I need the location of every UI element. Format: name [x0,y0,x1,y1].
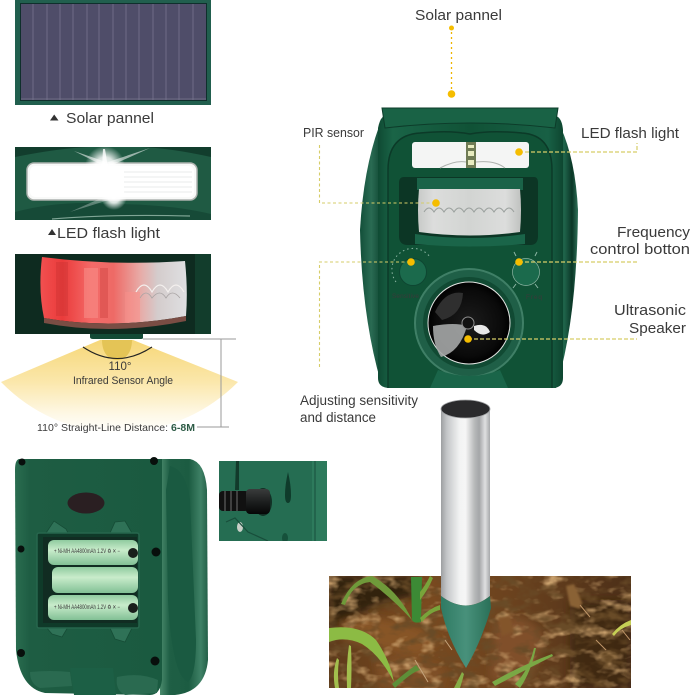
callout: LED flash light: LED flash light [581,126,679,142]
mount neck [30,671,158,695]
panel: power jack inset photo [219,461,327,543]
right side wing [548,114,578,388]
sensor mount [90,334,143,339]
solar lid [382,108,558,128]
bottom stand [430,370,508,388]
callout: PIR sensor: PIR sensor [303,125,365,140]
diagram: infrared sensor angle [1,334,238,434]
sensitivity knob [392,248,430,300]
caption: solar panel: Solar pannel [66,110,154,127]
photo: soil with seedlings [329,576,631,688]
steel tube [441,409,490,606]
angle label: Infrared Sensor Angle [73,375,173,387]
PIR sensor housing [399,177,538,246]
callout: solar pannel [415,7,502,98]
soil stones and straw [415,584,630,682]
device: front view [360,108,578,388]
green cone tip [441,596,491,668]
callout: frequency control botton [515,225,691,266]
callout: ultrasonic speaker: Speaker [629,321,686,337]
frequency knob: Freq [526,294,542,301]
inner arch [388,132,552,388]
sensitivity knob: Sensitive [392,293,419,300]
caption: LED flash light: LED flash light [57,225,161,242]
battery 1 [48,540,138,565]
LED lamp [412,142,529,168]
angle arc [83,347,152,358]
keyhole slot [285,472,291,503]
callout: LED flash light [515,126,679,156]
battery 2 [52,567,138,593]
callout: adjusting sensitivity and distance [300,258,418,425]
seedling leaves [329,576,631,688]
angle value: 110° [109,361,131,373]
callout: ultrasonic speaker [464,303,686,343]
tube opening [441,400,490,418]
callout: adjusting sensitivity and distance: and distance [300,410,376,425]
panel: solar panel photo [15,0,211,105]
screw holes [17,457,160,666]
callout: frequency control botton: Frequency [617,225,691,241]
callout: adjusting sensitivity and distance: Adjusting sensitivity [300,393,418,408]
inner sensor zone [102,340,132,360]
battery 3 [48,595,138,620]
stake: metal spike [441,400,491,668]
distance label: 110° Straight-Line Distance: 6-8M [37,422,195,434]
device body [378,116,563,388]
hanging slot [68,492,104,514]
callout: frequency control botton: control botton [590,242,690,258]
battery 1: + Ni-MH AA4800mAh 1.2V ♻ ✕ − [54,548,120,555]
battery 3: + Ni-MH AA4800mAh 1.2V ♻ ✕ − [54,604,120,611]
panel: PIR sensor red lens photo [15,254,211,334]
callout: PIR sensor [303,125,440,207]
left side wing [360,114,392,388]
frequency knob [512,252,542,301]
callout: solar pannel: Solar pannel [415,7,502,24]
battery tabs [46,521,132,642]
panel: LED flash light photo [15,146,211,220]
sensor fan [1,340,238,433]
distance bracket [143,339,236,427]
cable connector [219,461,272,516]
panel: device back with batteries [15,457,208,695]
callout: ultrasonic speaker: Ultrasonic [614,303,686,319]
screw post [237,522,243,532]
battery compartment [37,533,139,628]
ultrasonic speaker [415,269,523,377]
